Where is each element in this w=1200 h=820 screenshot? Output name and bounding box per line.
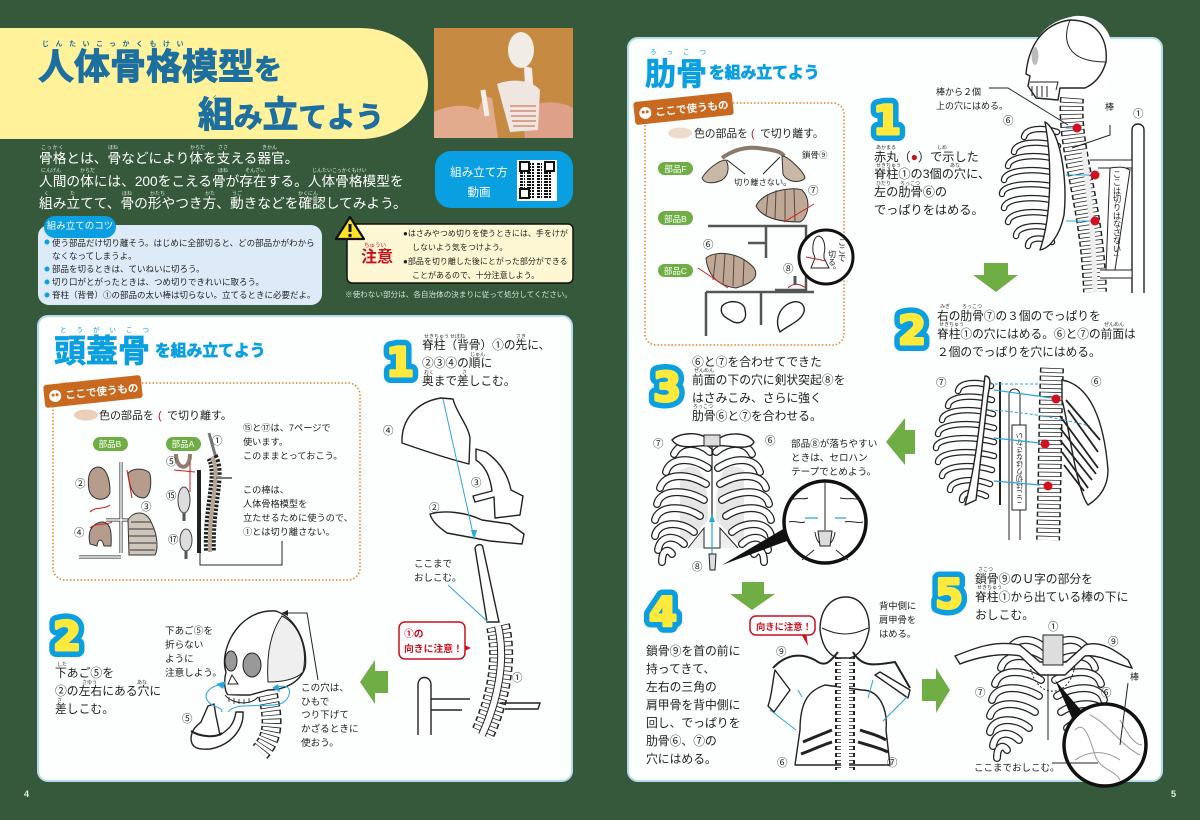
parts B: rib 7: ⑦: [808, 185, 819, 197]
tag: used here: [43, 375, 143, 408]
arrow: left: [360, 660, 388, 704]
step 3 badge: 3: [653, 365, 681, 411]
tips label: [44, 216, 116, 238]
step 4 back view illustration: [768, 597, 910, 770]
parts instruction: (: [158, 410, 162, 422]
step 4 note: 背中側に: [879, 600, 916, 611]
step 4 text: 持ってきて、: [646, 662, 715, 676]
parts note: [243, 423, 353, 537]
step 2 note: hole: [301, 683, 359, 749]
parts B: rib 7: [708, 185, 819, 290]
step 1 skeleton illustration: ①: [1133, 108, 1144, 120]
step 5 text: せきちゅう: [977, 584, 1002, 591]
step 1 skull parts illustration: ②: [429, 502, 440, 514]
intro text: ほね: [108, 145, 118, 151]
parts note: 立たせるために使うので、: [243, 512, 353, 523]
tips list: 使う部品だけ切り離そう。はじめに全部切ると、どの部品かがわから: [52, 238, 315, 248]
step 3 ribcage illustration: ⑧: [692, 561, 703, 573]
step 5 ribcage illustration: ⑥: [1101, 687, 1112, 699]
step 1 skeleton illustration: ここは切りはなさない↓: [1112, 170, 1122, 257]
step 1 text: あな: [950, 162, 960, 169]
parts A illustration: ⑤: [166, 456, 177, 468]
step 4 text: 左右の三角の: [646, 680, 717, 694]
step 3 text: [692, 355, 845, 423]
page number: right: 5: [1171, 789, 1176, 799]
step 1 badge: 1: [386, 340, 414, 386]
step 2 text: せきちゅう: [939, 321, 964, 328]
step 2 badge: 2: [53, 614, 81, 660]
step 4 text: 回し、でっぱりを: [646, 716, 740, 730]
intro text: 骨格とは、骨などにより体を支える器官。: [39, 151, 298, 166]
intro text: かくにん: [298, 190, 318, 197]
title banner: た: [276, 95, 282, 102]
callout: direction of part 1: [399, 622, 471, 659]
tips label: 組み立てのコツ: [47, 220, 113, 232]
parts F: clavicles: [702, 148, 828, 187]
step 1 badge: 1: [873, 98, 901, 144]
arrow: down: [730, 582, 775, 610]
parts note: 人体骨格模型を: [243, 498, 307, 509]
page number: left: 4: [24, 789, 29, 799]
heading: skull: を組み立てよう: [155, 342, 266, 360]
step 5 ribcage illustration: ⑦: [975, 687, 986, 699]
step 1 text: 左の肋骨⑥の: [874, 184, 947, 199]
step 3 ribcage illustration: ⑥: [765, 435, 776, 447]
step 1 skeleton illustration: 上の穴にはめる。: [936, 101, 1008, 111]
step 4 back view illustration: ⑨: [776, 646, 787, 658]
step 1 badge: 1: [873, 98, 901, 144]
parts F: clavicles: 切り離さない。: [734, 177, 791, 187]
parts label B: 部品B: [99, 439, 122, 449]
step 2 note: jaw: 折らない: [165, 639, 203, 651]
title banner: く: [212, 95, 218, 102]
parts A illustration: [166, 433, 282, 565]
step 4 text: 鎖骨⑨を首の前に: [646, 644, 740, 658]
caution box: ことがあるので、十分注意しよう。: [412, 270, 539, 280]
step 4 badge: 4: [649, 590, 677, 636]
magnifier: bar: 棒: [1130, 671, 1139, 682]
intro text: [39, 144, 407, 211]
parts note: ①とは切り離さない。: [243, 526, 335, 537]
step 1 spine illustration: ここまで: [414, 559, 452, 570]
heading: ribs: 肋骨: [645, 57, 707, 92]
parts label A: 部品A: [172, 439, 195, 449]
parts instruction: (: [751, 128, 755, 140]
step 1 text: じゅん: [470, 352, 485, 358]
step 2 text: 下あご⑤を: [55, 666, 114, 680]
callout: direction: 向きに注意！: [756, 621, 812, 632]
step 2 skeleton illustration: ここは切りはなさない: [1014, 432, 1024, 504]
footnote: ※使わない部分は、各自治体の決まりに従って処分してください。: [345, 289, 572, 299]
parts B illustration: ③: [141, 501, 152, 513]
parts A illustration: ①: [212, 435, 223, 447]
step 3 text: ぜんめん: [694, 368, 714, 374]
parts instruction: で切り離す。: [167, 408, 232, 422]
intro text: そんざい: [245, 167, 265, 174]
tips list: 部品を切るときは、ていねいに切ろう。: [52, 264, 204, 274]
parts instruction: 色の部品を: [694, 127, 748, 140]
step 3 ribcage illustration: [653, 434, 776, 573]
step 2 skull illustration: [182, 610, 318, 752]
step 2 text: 脊柱①の穴にはめる。⑥と⑦の前面は: [937, 327, 1136, 341]
step 1 text: せぼね: [450, 333, 465, 340]
step 5 badge: 5: [935, 572, 963, 618]
step 1 text: 脊柱（背骨）①の先に、: [422, 338, 550, 352]
step 1 text: 脊柱①の3個の穴に、: [874, 166, 990, 181]
step 2 note: hole: ひもで: [301, 697, 329, 708]
step 3 note: [791, 438, 877, 478]
step 4 back view illustration: ⑦: [887, 757, 898, 769]
intro text: た: [70, 191, 75, 197]
intro text: ほね: [122, 191, 132, 197]
step 2 note: hole: 使おう。: [301, 737, 339, 749]
intro text: にんげん: [41, 167, 61, 174]
step 1 text: おく: [424, 369, 434, 376]
heading: ribs: ろっこつ: [650, 48, 716, 56]
magnifier: cut here: 切る。: [828, 250, 836, 274]
title banner: 組み立てよう: [198, 94, 384, 135]
step 1 spine illustration: おしこむ。: [414, 573, 462, 584]
magnifier: sternum: [722, 481, 866, 565]
step 2 note: jaw: 注意しよう。: [165, 667, 222, 679]
step 2 text: みぎ: [940, 303, 950, 310]
tag: used here: ここで使うもの: [65, 381, 139, 402]
intro text: 人間の体には、200をこえる骨が存在する。人体骨格模型を: [39, 174, 404, 189]
step 1 text: しめ: [937, 145, 947, 151]
parts note: ⑮と⑰は、7ページで: [243, 423, 331, 433]
step 5 badge: 5: [935, 572, 963, 618]
caution box: 注意: [361, 248, 393, 266]
parts C: rib 6: [698, 239, 814, 336]
step 2 note: jaw: 下あご⑤を: [165, 625, 213, 637]
step 2 text: 右の肋骨⑦の３個のでっぱりを: [937, 309, 1101, 323]
intro text: こっかく: [41, 144, 65, 151]
magnifier: bar: ここまでおしこむ。: [974, 763, 1060, 774]
step 5 text: [975, 566, 1128, 622]
icon: QR code: [517, 160, 557, 201]
step 1 skull parts illustration: ③: [471, 477, 482, 489]
tips list: 脊柱（背骨）①の部品の太い棒は切らない。立てるときに必要だよ。: [52, 290, 316, 300]
step 4 note: 肩甲骨を: [879, 615, 916, 625]
step 1 spine illustration: [414, 545, 540, 735]
video button with QR code: 組み立て方: [450, 165, 508, 179]
step 3 text: ろっこつ: [693, 404, 713, 410]
parts B illustration: [74, 462, 157, 557]
step 2 note: jaw: [165, 625, 222, 679]
parts note: このままとっておこう。: [243, 451, 342, 461]
step 1 skeleton illustration: 棒: [1105, 101, 1114, 112]
title banner: じんたいこっかくもけい: [42, 40, 190, 48]
step 1 spine illustration: ①: [512, 672, 523, 684]
caution box: しないよう気をつけよう。: [412, 242, 507, 252]
step 2 text: ぜんめん: [1104, 322, 1124, 328]
arrow: right: [922, 668, 950, 713]
step 1 skeleton illustration: [936, 16, 1144, 293]
intro text: 組み立てて、骨の形やつき方、動きなどを確認してみよう。: [39, 196, 407, 211]
caution box: ●はさみやつめ切りを使うときには、手をけが: [403, 228, 568, 238]
caution box: ●部品を切り離した後にとがった部分ができる: [403, 256, 568, 266]
step 4 note: はめる。: [879, 629, 916, 639]
tips box: [38, 216, 322, 305]
parts C: rib 6: ⑥: [703, 239, 714, 251]
icon: warning triangle: [336, 217, 364, 239]
step 2 note: hole: かざるときに: [301, 723, 359, 735]
callout: direction of part 1: ①の: [404, 628, 424, 640]
step 2 text: した: [57, 662, 67, 668]
step 2 badge: 2: [53, 614, 81, 660]
step 1 text: さ: [462, 369, 467, 376]
step 4 text: [646, 644, 740, 766]
magnifier: cut here: [799, 230, 853, 284]
parts instruction: 色の部品を: [99, 409, 154, 422]
step 5 text: 鎖骨⑨のＵ字の部分を: [975, 572, 1093, 586]
step 1 text: せきちゅう: [424, 333, 449, 340]
heading: ribs: を組み立てよう: [709, 64, 820, 82]
step 3 ribcage illustration: ⑦: [653, 438, 664, 450]
caution box: [336, 217, 573, 283]
step 2 text: さゆう: [82, 679, 97, 686]
step 2 skull illustration: ⑤: [182, 713, 193, 725]
step 2 text: [55, 662, 161, 716]
step 1 text: [422, 333, 550, 388]
step 1 text: でっぱりをはめる。: [874, 203, 984, 217]
parts box: [633, 92, 853, 345]
step 1 skeleton illustration: ⑥: [1003, 115, 1014, 127]
step 1 text: 赤丸（●）で示した: [874, 150, 979, 164]
parts labels: 部品F: [664, 164, 687, 174]
parts C: pelvis pieces: [721, 302, 804, 332]
parts label A: [166, 437, 201, 451]
parts A illustration: ⑰: [168, 534, 179, 546]
intro text: ささ: [218, 144, 228, 151]
step 3 text: 前面の下の穴に剣状突起⑧を: [692, 373, 845, 387]
step 4 badge: 4: [649, 590, 677, 636]
step 4 text: 肋骨⑥、⑦の: [646, 734, 717, 748]
parts note: 使います。: [243, 436, 288, 447]
title banner: [0, 28, 428, 139]
step 1 text: あかまる: [876, 144, 896, 151]
tag: used here: [633, 92, 734, 125]
step 2 skeleton illustration: ⑦: [936, 377, 947, 389]
step 5 ribcage illustration: [955, 621, 1132, 758]
intro text: からだ: [80, 167, 95, 174]
step 2 text: ろっこつ: [962, 304, 982, 310]
step 5 text: 脊柱①から出ている棒の下に: [975, 590, 1128, 604]
parts instruction: で切り離す。: [760, 126, 824, 140]
parts label B: [93, 437, 128, 451]
step 2 note: jaw: ように: [165, 654, 194, 665]
title banner: 人体骨格模型を: [38, 46, 282, 87]
intro text: かたち: [150, 190, 165, 197]
step 2 badge: 2: [898, 308, 926, 354]
step 1 text: ひだり: [876, 181, 891, 187]
video button with QR code: [435, 151, 573, 208]
step 2 text: [937, 303, 1136, 359]
panel: skull (left page): [38, 316, 572, 781]
step 2 note: hole: つり下げて: [301, 710, 349, 721]
panel: ribs (right page): [628, 16, 1162, 786]
step 1 text: さき: [516, 333, 526, 340]
tag: used here: ここで使うもの: [655, 98, 729, 119]
step 2 skeleton illustration: [936, 368, 1108, 540]
step 2 note: hole: この穴は、: [301, 683, 349, 694]
magnifier: bar: [974, 671, 1146, 786]
step 1 text: ろっこつ: [900, 181, 920, 187]
video button with QR code: 動画: [468, 185, 490, 199]
step 3 note: ときは、セロハン: [791, 453, 868, 464]
step 5 text: さこつ: [978, 566, 993, 573]
step 1 skull parts illustration: ④: [383, 425, 394, 437]
step 3 text: 肋骨⑥と⑦を合わせる。: [692, 409, 822, 423]
parts instruction: [668, 126, 824, 140]
intro text: ほね: [218, 168, 228, 174]
parts labels: 部品B: [664, 214, 687, 224]
intro text: からだ: [190, 144, 205, 151]
arrow: down: [973, 263, 1018, 292]
step 4 note: [879, 600, 916, 639]
parts A illustration: ⑮: [166, 490, 177, 502]
step 3 text: はさみこみ、さらに強く: [692, 391, 822, 405]
step 2 text: あな: [137, 679, 147, 686]
tips list: なくなってしまうよ。: [52, 251, 137, 261]
intro text: うご: [232, 190, 242, 197]
intro text: きかん: [262, 144, 277, 151]
step 4 text: 穴にはめる。: [646, 752, 717, 766]
step 1 text: ②③④の順に: [422, 357, 492, 370]
tips list: [44, 238, 316, 300]
step 1 badge: 1: [386, 340, 414, 386]
parts F: clavicles: 鎖骨⑨: [802, 150, 828, 160]
step 2 skeleton illustration: ⑥: [1091, 376, 1102, 388]
heading: skull: とうがいこつ: [60, 325, 159, 334]
step 1 skeleton illustration: 棒から２個: [936, 86, 981, 97]
parts C: rib 6: ⑧: [783, 263, 794, 275]
step 1 skull parts illustration: [383, 398, 524, 544]
step 2 text: 差しこむ。: [55, 702, 114, 716]
tips list: 切り口がとがったときは、つめ切りできれいに取ろう。: [52, 277, 264, 287]
intro text: かた: [205, 190, 215, 197]
step 5 ribcage illustration: ①: [1048, 621, 1059, 633]
callout: direction of part 1: 向きに注意！: [404, 642, 463, 655]
step 1 text: せきちゅう: [876, 162, 901, 169]
step 5 ribcage illustration: ⑨: [1108, 636, 1119, 648]
heading: ribs: [645, 48, 820, 92]
step 2 text: ２個のでっぱりを穴にはめる。: [937, 346, 1101, 359]
step 2 text: ②の左右にある穴に: [55, 684, 161, 698]
intro text: じんたいこっかくもけい: [312, 167, 367, 174]
step 1 text: 奥まで差しこむ。: [422, 374, 516, 388]
parts labels: [658, 162, 693, 277]
arrow: left: [886, 418, 915, 465]
parts instruction: [74, 408, 232, 422]
step 3 note: 部品⑧が落ちやすい: [791, 438, 877, 450]
step 3 note: テープでとめよう。: [791, 467, 876, 478]
heading: skull: 頭蓋骨: [54, 333, 150, 369]
parts B illustration: ②: [75, 478, 86, 490]
caution box: ちゅうい: [364, 242, 387, 249]
intro text: く: [44, 191, 49, 197]
parts B illustration: ④: [74, 527, 85, 539]
parts box: [43, 375, 360, 580]
magnifier: cut here: ここで: [838, 238, 846, 262]
callout: direction: [750, 616, 815, 646]
photo: hands holding skeleton model: [434, 28, 573, 138]
step 5 text: おしこむ。: [975, 608, 1034, 622]
heading: skull: [54, 325, 266, 369]
step 2 text: さ: [57, 697, 62, 704]
step 3 text: ⑥と⑦を合わせてできた: [692, 355, 822, 369]
step 2 badge: 2: [898, 308, 926, 354]
step 4 text: 肩甲骨を背中側に: [646, 698, 740, 712]
parts labels: 部品C: [664, 266, 687, 276]
step 4 back view illustration: ⑥: [777, 757, 788, 769]
step 1 text: [874, 144, 990, 217]
parts note: この棒は、: [243, 484, 289, 495]
step 3 badge: 3: [653, 365, 681, 411]
